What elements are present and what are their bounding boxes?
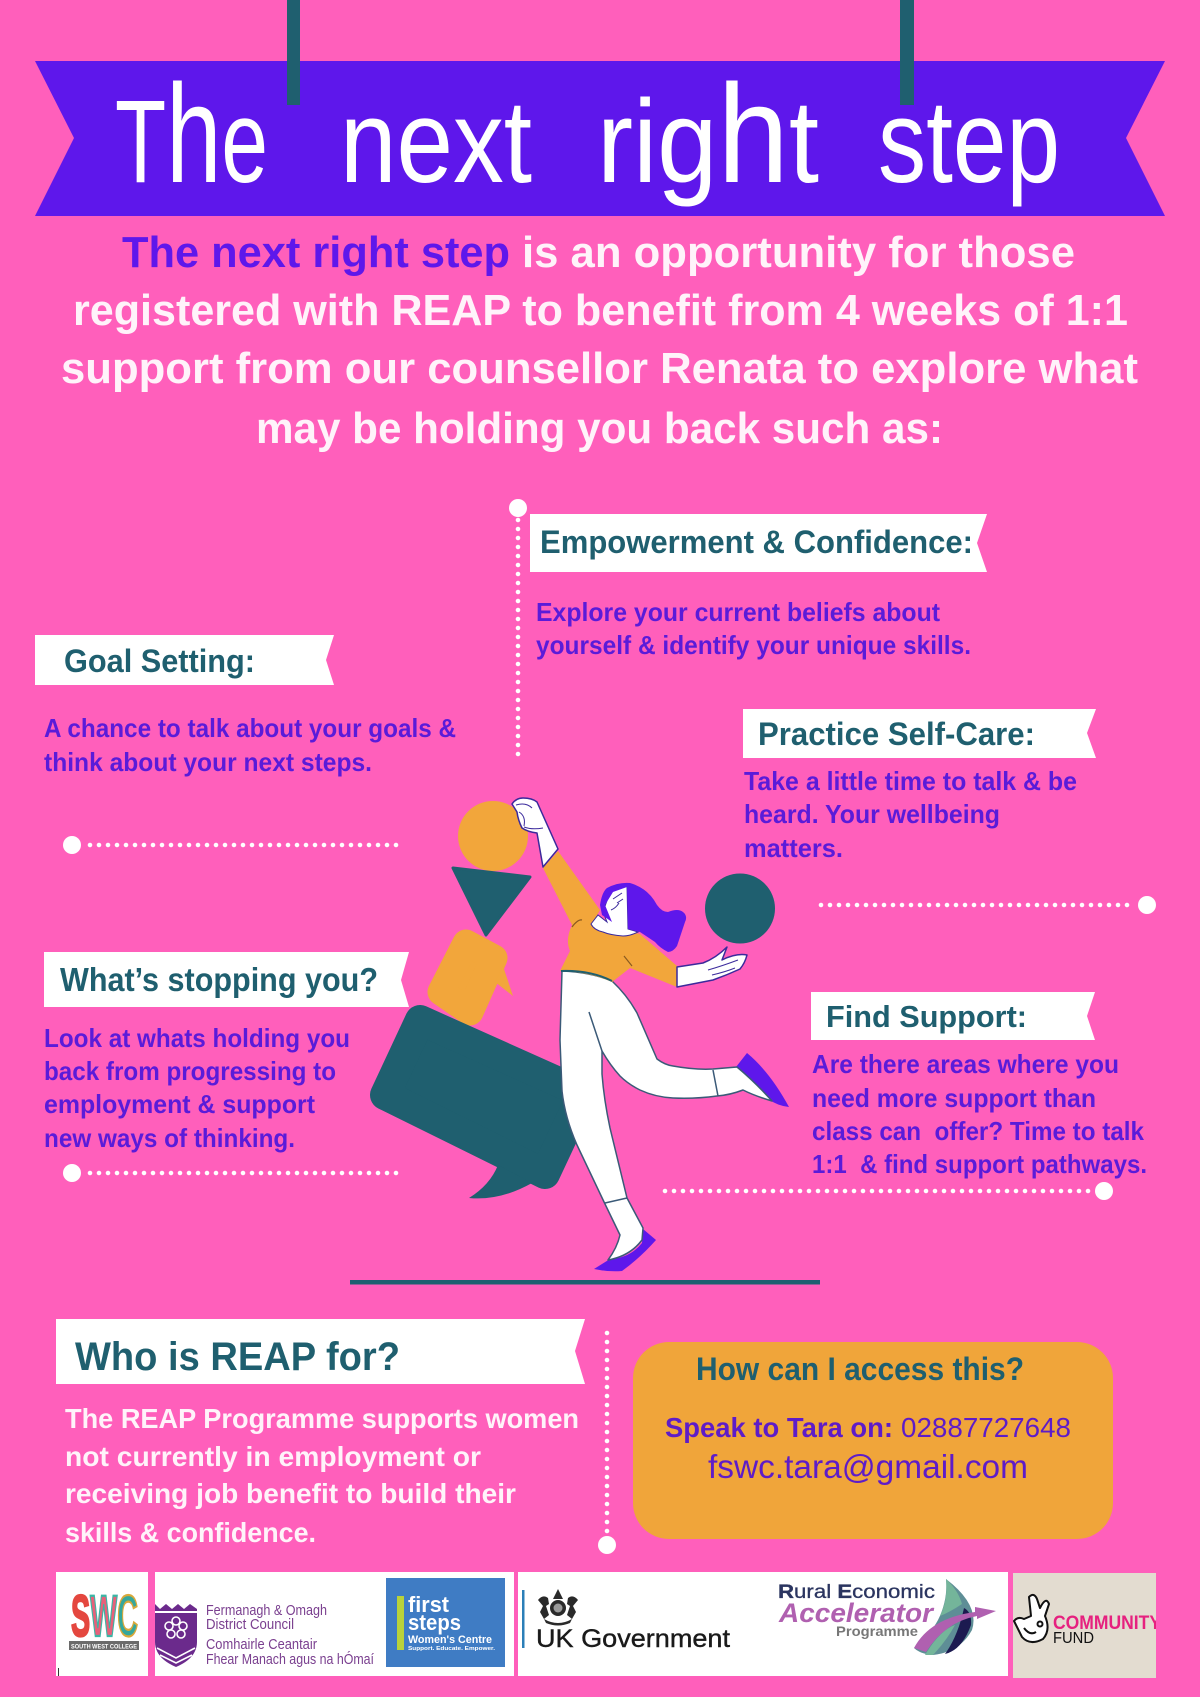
panel: find support: need more support than — [812, 1083, 1096, 1113]
shape: orange circle — [458, 801, 528, 871]
panel: who is REAP for: receiving job benefit to build their — [65, 1478, 516, 1509]
panel: practice self-care: Take a little time to talk & be — [744, 766, 1077, 796]
connector: bottom vertical dotted line — [598, 1333, 616, 1554]
panel: practice self-care — [743, 709, 1096, 863]
council name: Fermanagh & Omagh — [206, 1603, 327, 1619]
icon: leaf and arrow — [914, 1579, 996, 1655]
Rural Economic Accelerator wordmark: Rural Economic — [778, 1582, 935, 1603]
intro text: The next right step — [122, 228, 510, 277]
council name: District Council — [206, 1617, 294, 1633]
panel: find support: Are there areas where you — [812, 1049, 1119, 1079]
panel: goal setting: Goal Setting: — [64, 643, 255, 679]
panel: who is REAP for: The REAP Programme supports women — [65, 1403, 579, 1434]
icon: crossed fingers hand — [1014, 1595, 1049, 1642]
panel: empowerment and confidence: yourself & identify your unique skills. — [536, 630, 971, 660]
panel: who is REAP for: skills & confidence. — [65, 1517, 316, 1548]
panel: what's stopping you: new ways of thinking. — [44, 1123, 295, 1153]
shape: teal triangle — [453, 868, 530, 935]
connector: top vertical dotted line — [509, 499, 527, 755]
panel: how can I access this: Speak to Tara on: — [665, 1412, 893, 1443]
intro text — [61, 228, 1138, 453]
logo: UK Government and Rural Economic Accelerator Programme: UK Government — [536, 1625, 730, 1653]
council name: Fhear Manach agus na hÓmaí — [206, 1651, 374, 1668]
figure: hair — [600, 883, 686, 952]
Rural Economic Accelerator wordmark: Accelerator — [778, 1598, 935, 1628]
panel: practice self-care: matters. — [744, 833, 843, 863]
logo: South West College — [56, 1572, 148, 1676]
figure: face and neck — [591, 886, 638, 936]
panel: find support — [811, 992, 1147, 1179]
logo: First Steps Women's Centre: Women's Centre — [408, 1634, 492, 1646]
panel: find support: 1:1 & find support pathways. — [812, 1149, 1147, 1179]
logo: UK Government and Rural Economic Accelerator Programme — [518, 1572, 1008, 1676]
panel: goal setting: A chance to talk about your goals & — [44, 713, 456, 743]
shape: teal circle — [705, 874, 775, 944]
council name — [206, 1603, 374, 1668]
panel: what's stopping you: Look at whats holding you — [44, 1023, 350, 1053]
figure: facial features — [611, 893, 623, 910]
figure: sleeve creases — [572, 920, 632, 966]
figure: waistband — [561, 971, 612, 981]
illustration: woman balancing shapes — [385, 798, 789, 1271]
intro text: is an opportunity for those — [522, 228, 1075, 277]
panel: how can I access this: fswc.tara@gmail.com — [708, 1448, 1028, 1485]
figure: shoes — [594, 1053, 789, 1271]
panel: empowerment and confidence — [530, 514, 987, 660]
figure: orange top — [543, 851, 677, 987]
panel: how can I access this: How can I access this? — [696, 1351, 1024, 1387]
panel: goal setting: think about your next steps. — [44, 747, 372, 777]
Rural Economic Accelerator wordmark — [778, 1582, 935, 1639]
intro text: registered with REAP to benefit from 4 weeks of 1:1 — [73, 286, 1128, 335]
shape: teal speech bubble — [385, 1020, 583, 1198]
title: step — [878, 76, 1060, 208]
panel: who is REAP for: not currently in employment or — [65, 1441, 481, 1472]
community fund wordmark: FUND — [1053, 1630, 1094, 1647]
panel: how can I access this — [633, 1342, 1113, 1539]
title: next — [340, 76, 532, 208]
panel: what's stopping you: back from progressing to — [44, 1056, 336, 1086]
panel: how can I access this: 02887727648 — [901, 1412, 1071, 1443]
logo: South West College: SWC — [71, 1584, 138, 1649]
figure: raised hand — [512, 798, 558, 867]
intro text: support from our counsellor Renata to explore what — [61, 344, 1138, 393]
connector: right upper dotted line — [821, 896, 1156, 914]
logo: Fermanagh and Omagh District Council — [155, 1572, 514, 1676]
panel: empowerment and confidence: Empowerment & Confidence: — [540, 524, 973, 560]
ground line — [350, 1280, 820, 1284]
title: The — [115, 55, 268, 212]
panel: find support: Find Support: — [826, 999, 1027, 1034]
panel: what's stopping you: What’s stopping you? — [60, 961, 378, 998]
panel: who is REAP for — [56, 1319, 585, 1548]
logo: First Steps Women's Centre — [386, 1578, 505, 1667]
shape: orange speech bubble — [441, 943, 513, 1012]
panel: goal setting — [35, 635, 456, 777]
title: right — [597, 55, 819, 212]
logo: First Steps Women's Centre: Support. Educate. Empower. — [408, 1646, 496, 1652]
figure: clothing creases — [589, 1012, 718, 1203]
connector: left lower dotted line — [63, 1164, 400, 1182]
intro text: may be holding you back such as: — [256, 404, 943, 453]
icon: royal crest — [538, 1589, 578, 1626]
community fund wordmark — [1053, 1613, 1161, 1647]
panel: practice self-care: Practice Self-Care: — [758, 716, 1035, 752]
Rural Economic Accelerator wordmark: Programme — [836, 1623, 918, 1639]
figure: trousers — [560, 971, 772, 1260]
connector: right lower dotted line — [665, 1182, 1113, 1200]
panel: what's stopping you — [44, 952, 409, 1153]
icon: council shield — [155, 1604, 197, 1667]
council name: Comhairle Ceantair — [206, 1637, 317, 1653]
title banner — [35, 0, 1165, 216]
logo: South West College: SOUTH WEST COLLEGE — [71, 1644, 138, 1650]
panel: who is REAP for: Who is REAP for? — [75, 1335, 400, 1379]
figure: open hand — [677, 947, 747, 987]
panel: practice self-care: heard. Your wellbeing — [744, 799, 1000, 829]
panel: empowerment and confidence: Explore your current beliefs about — [536, 597, 940, 627]
title — [115, 55, 1060, 212]
logo: Community Fund — [1013, 1573, 1161, 1678]
logo: First Steps Women's Centre: steps — [408, 1610, 461, 1635]
logo: First Steps Women's Centre: first — [408, 1592, 450, 1617]
connector: left upper dotted line — [63, 836, 400, 854]
panel: find support: class can offer? Time to talk — [812, 1116, 1145, 1146]
panel: what's stopping you: employment & support — [44, 1089, 315, 1119]
